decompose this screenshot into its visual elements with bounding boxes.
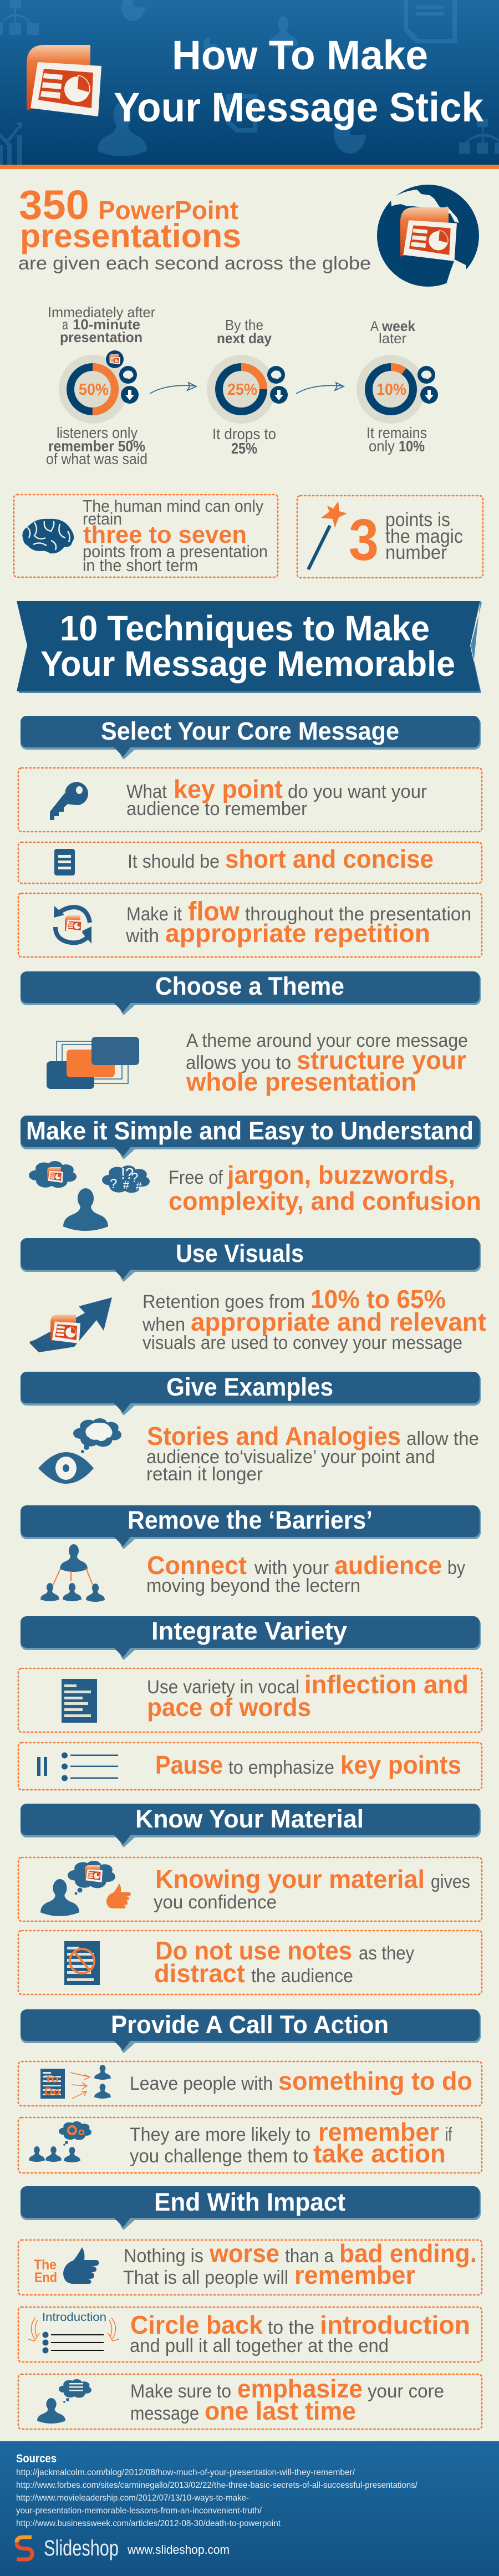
text: three to seven: The human mind can only <box>83 496 263 516</box>
text: They are more likely to <box>130 2124 310 2145</box>
text: points is the magic number: the magic <box>385 526 463 547</box>
heading: Select Your Core Message <box>21 716 481 760</box>
text: retention: when <box>142 1314 185 1335</box>
text <box>125 897 471 948</box>
footer <box>0 2441 499 2576</box>
donut: 10% <box>357 355 438 424</box>
text: jargon <box>169 1160 481 1215</box>
icon: the end thumb: End <box>34 2270 57 2285</box>
stat: 350 presentations <box>18 182 371 273</box>
text: stories <box>146 1422 479 1485</box>
text: 3: 3 <box>349 507 379 573</box>
text <box>130 2374 444 2425</box>
title: How To Make <box>172 32 428 78</box>
sources: your-presentation-memorable-lessons-from-an-inconvenient-truth/ <box>16 2506 262 2516</box>
text: stories: allow the <box>406 1428 479 1449</box>
icon: introduction list <box>28 2311 119 2353</box>
header <box>0 0 499 169</box>
icon: to do list: To <box>44 2073 59 2085</box>
panel: knowing your material <box>18 1857 482 1921</box>
text: listeners remember: listeners only <box>57 424 138 441</box>
icon: to do list: Do <box>44 2086 60 2098</box>
heading: Integrate Variety: Integrate Variety <box>151 1617 347 1645</box>
text: emphasize <box>237 2374 363 2403</box>
icon: brain <box>22 519 74 553</box>
heading: Provide A Call To Action: Provide A Call To Action <box>111 2010 389 2039</box>
text: to the <box>268 2317 314 2338</box>
text: connect: with your <box>254 1557 329 1579</box>
icon: prohibited notes <box>64 1941 100 1985</box>
icon: the end thumb <box>34 2247 99 2285</box>
text: take action <box>313 2139 446 2168</box>
text: retention: visuals are used to convey your message <box>142 1332 462 1353</box>
text: as they <box>359 1943 414 1964</box>
text: Make it <box>126 904 182 925</box>
icon: person with clouds: ? <box>110 1177 117 1192</box>
text: you challenge them to <box>130 2146 308 2167</box>
heading: Make it Simple: Make it Simple and Easy to Understand <box>26 1117 473 1145</box>
text: after ten minutes: presentation <box>60 329 142 345</box>
text: Use variety in vocal <box>147 1677 299 1698</box>
text <box>123 2239 477 2289</box>
text: bad ending. <box>339 2239 477 2268</box>
text: and pull it all together at the end <box>130 2335 389 2356</box>
text: key points <box>340 1750 461 1779</box>
text: Nothing is <box>124 2246 203 2267</box>
donut: 50% <box>59 350 139 424</box>
text: Circle back <box>130 2310 263 2339</box>
arrow <box>296 383 344 394</box>
panel: do not use notes <box>18 1931 482 1994</box>
text: after ten minutes: a <box>62 316 68 333</box>
icon: pause list <box>37 1752 118 1781</box>
icon: cycle arrows <box>54 906 91 944</box>
text: flow <box>188 897 240 926</box>
text: stories: audience to‘visualize’ your point and <box>146 1447 435 1468</box>
text: you confidence <box>154 1892 277 1913</box>
icon: globe with PowerPoint logo <box>377 185 479 287</box>
sources: http://www.forbes.com/sites/carminegallo/2013/02/22/the-three-basic-secrets-of-all-successful-presentations/ <box>16 2481 418 2490</box>
text <box>130 2117 452 2168</box>
text <box>154 1865 470 1913</box>
donut: 25% <box>207 355 288 424</box>
text: points is the magic number: points is <box>385 509 450 531</box>
heading: Know Your Material: Know Your Material <box>135 1805 364 1833</box>
icon: person with clouds: ? <box>131 1170 138 1185</box>
text: retention <box>142 1285 486 1353</box>
icon: person with clouds <box>29 1161 150 1231</box>
text: a week later <box>370 318 416 347</box>
text: remember <box>318 2117 439 2146</box>
text: to emphasize <box>228 1757 334 1778</box>
text: It should be <box>128 851 220 872</box>
background ghost icons <box>0 0 499 165</box>
logo: Slideshop: Slideshop <box>44 2536 119 2560</box>
heading: Remove the Barriers: Remove the ‘Barriers’ <box>128 1506 373 1534</box>
text: a week later: week <box>381 318 416 334</box>
text: it remains: 10% <box>399 437 425 455</box>
text: retention: 10% to 65% <box>310 1285 446 1314</box>
logo: Slideshop <box>17 2536 230 2560</box>
text: connect: moving beyond the lectern <box>146 1575 360 1596</box>
logo: Slideshop: www.slideshop.com <box>127 2543 230 2557</box>
panel: bad ending <box>18 2239 482 2295</box>
text: a week later: later <box>379 330 406 347</box>
text: connect: audience <box>334 1551 442 1580</box>
stat: 350 presentations: PowerPoint <box>98 196 238 225</box>
text: Pause <box>155 1750 223 1779</box>
icon: PowerPoint logo <box>27 45 101 116</box>
text: connect: Connect <box>147 1551 247 1580</box>
text: stories: Stories and Analogies <box>147 1422 401 1450</box>
stat: 350 presentations: are given each second across the globe <box>18 253 371 273</box>
text: worse <box>209 2239 279 2268</box>
stat: 350 presentations: presentations <box>20 217 241 254</box>
icon: key <box>50 782 88 820</box>
heading: End With Impact <box>21 2186 481 2230</box>
text: That is all people will <box>123 2267 288 2288</box>
icon: eye with thought <box>38 1418 121 1484</box>
heading: Use Visuals: Use Visuals <box>176 1239 304 1267</box>
panel: human mind <box>14 495 278 577</box>
text: theme: allows you to <box>186 1052 291 1073</box>
text: gives <box>431 1871 470 1892</box>
text <box>130 2066 472 2095</box>
arrow <box>150 383 196 394</box>
text: three to seven: three to seven <box>83 521 247 548</box>
heading: Provide A Call To Action <box>21 2009 481 2053</box>
heading: Choose a Theme <box>21 971 481 1015</box>
heading: Choose a Theme: Choose a Theme <box>155 972 344 1000</box>
stat: 350 presentations: 350 <box>19 182 89 228</box>
panel: short and concise <box>18 842 482 883</box>
text: after ten minutes: 10-minute <box>73 316 140 333</box>
text: connect <box>146 1551 465 1596</box>
text: introduction <box>320 2310 470 2339</box>
icon: document <box>54 849 75 875</box>
text: jargon: complexity, and confusion <box>169 1187 481 1215</box>
text: Leave people with <box>130 2073 273 2094</box>
heading: Remove the Barriers <box>21 1505 481 1549</box>
icon: text document <box>62 1679 97 1723</box>
panel: something to do <box>18 2061 482 2106</box>
text: jargon: jargon, buzzwords, <box>227 1160 455 1189</box>
icon: person with clouds: !? <box>121 1165 134 1182</box>
text: a week later: A <box>370 318 379 334</box>
text: Do not use notes <box>155 1936 352 1965</box>
donut: 10%: 10% <box>376 381 406 399</box>
panel: inflection and pace <box>18 1668 482 1732</box>
icon: audience with gears <box>29 2121 91 2162</box>
text: listeners remember: remember 50% <box>48 437 145 455</box>
panel: retention timeline <box>46 304 438 467</box>
text: appropriate repetition <box>165 919 430 948</box>
text: do you want your <box>288 781 427 802</box>
text <box>128 844 434 873</box>
text: inflection and <box>304 1670 469 1699</box>
text: theme <box>186 1030 468 1096</box>
panel: take action <box>18 2117 482 2173</box>
text: retention: appropriate and relevant <box>191 1307 486 1336</box>
text <box>130 2310 470 2356</box>
heading: Give Examples <box>21 1372 481 1416</box>
sources: Sources <box>16 2452 57 2465</box>
text: jargon: Free of <box>169 1167 223 1188</box>
text: three to seven <box>83 496 268 575</box>
icon: person thinking <box>37 2379 91 2424</box>
title <box>114 32 484 130</box>
text <box>126 775 427 819</box>
banner: 10 techniques: Your Message Memorable <box>40 644 455 684</box>
text: listeners remember: of what was said <box>46 450 147 467</box>
heading: Know Your Material <box>21 1804 481 1847</box>
title: Your Message Stick <box>114 84 484 130</box>
text: key point <box>174 775 283 803</box>
text: one last time <box>205 2396 356 2425</box>
icon: person with clouds: # <box>136 1181 142 1193</box>
text: it drops: It drops to <box>212 425 276 442</box>
text: listeners remember <box>46 424 147 467</box>
sources: http://www.movieleadership.com/2012/07/13/10-ways-to-make- <box>16 2493 249 2503</box>
icon: to do list <box>40 2065 111 2099</box>
text: by the next day: By the <box>225 317 263 333</box>
text: stories: retain it longer <box>146 1464 263 1485</box>
text: connect: by <box>447 1557 465 1579</box>
heading: End With Impact: End With Impact <box>154 2188 345 2216</box>
text: points is the magic number <box>385 509 463 563</box>
panel: key point <box>18 768 482 832</box>
panel: magic number <box>297 496 483 578</box>
heading: Give Examples: Give Examples <box>166 1373 333 1401</box>
panel: pause <box>18 1743 482 1790</box>
sources <box>16 2452 418 2528</box>
text: Make sure to <box>130 2381 231 2402</box>
text <box>155 1750 461 1779</box>
heading: Use Visuals <box>21 1238 481 1282</box>
text: by the next day <box>217 317 272 347</box>
text: three to seven: retain <box>83 509 122 528</box>
donut: 50%: 50% <box>79 381 109 399</box>
icon: the end thumb: The <box>34 2257 57 2273</box>
icon: theme slides <box>47 1037 139 1089</box>
panel: emphasize <box>18 2374 482 2429</box>
text: retention: Retention goes from <box>142 1291 305 1312</box>
text: if <box>445 2124 452 2145</box>
text: pace of words <box>147 1693 311 1722</box>
banner: 10 techniques <box>17 601 482 693</box>
sources: http://jackmalcolm.com/blog/2012/08/how-much-of-your-presentation-will-they-remember/ <box>16 2468 355 2477</box>
text: three to seven: in the short term <box>83 556 198 575</box>
text: message <box>130 2403 199 2424</box>
text <box>154 1936 414 1988</box>
text: the audience <box>251 1966 353 1987</box>
text: it remains: only <box>369 437 395 455</box>
text: remember <box>294 2261 415 2289</box>
text: after ten minutes <box>48 304 155 345</box>
text: your core <box>368 2381 444 2402</box>
text: theme: A theme around your core message <box>186 1030 468 1051</box>
text: than a <box>285 2246 334 2267</box>
text: theme: whole presentation <box>186 1067 416 1096</box>
heading: Integrate Variety <box>21 1616 481 1660</box>
text: Knowing your material <box>155 1865 425 1893</box>
text: it remains: It remains <box>366 424 427 441</box>
heading: Make it Simple <box>21 1116 481 1159</box>
icon: person with clouds: # <box>123 1179 130 1192</box>
text: points is the magic number: number <box>385 542 447 563</box>
donut: 25%: 25% <box>227 381 257 399</box>
icon: confident person <box>40 1861 131 1916</box>
icon: introduction list: Introduction <box>42 2311 106 2324</box>
text: three to seven: points from a presentation <box>83 542 268 561</box>
heading: Select Your Core Message: Select Your Core Message <box>101 717 399 745</box>
panel: circle back <box>18 2307 482 2362</box>
text: short and concise <box>225 844 434 873</box>
text: audience to remember <box>126 798 307 819</box>
text: with <box>125 925 159 946</box>
icon: magic wand <box>308 501 347 569</box>
banner: 10 techniques: 10 Techniques to Make <box>60 608 430 648</box>
text: it remains <box>366 424 427 455</box>
sources: http://www.businessweek.com/articles/2012-08-30/death-to-powerpoint <box>16 2519 281 2528</box>
text: theme: structure your <box>297 1046 466 1075</box>
panel: flow and repetition <box>18 893 482 957</box>
text: after ten minutes: Immediately after <box>48 304 155 320</box>
text: it drops <box>212 425 276 457</box>
text: What <box>126 781 167 802</box>
text: distract <box>154 1959 245 1988</box>
text: throughout the presentation <box>245 904 471 925</box>
text: by the next day: next day <box>217 330 272 347</box>
text: it drops: 25% <box>231 440 257 457</box>
text: something to do <box>278 2066 472 2095</box>
icon: speaker and audience <box>40 1544 105 1602</box>
text <box>147 1670 469 1722</box>
icon: up arrow with logo <box>29 1297 112 1352</box>
